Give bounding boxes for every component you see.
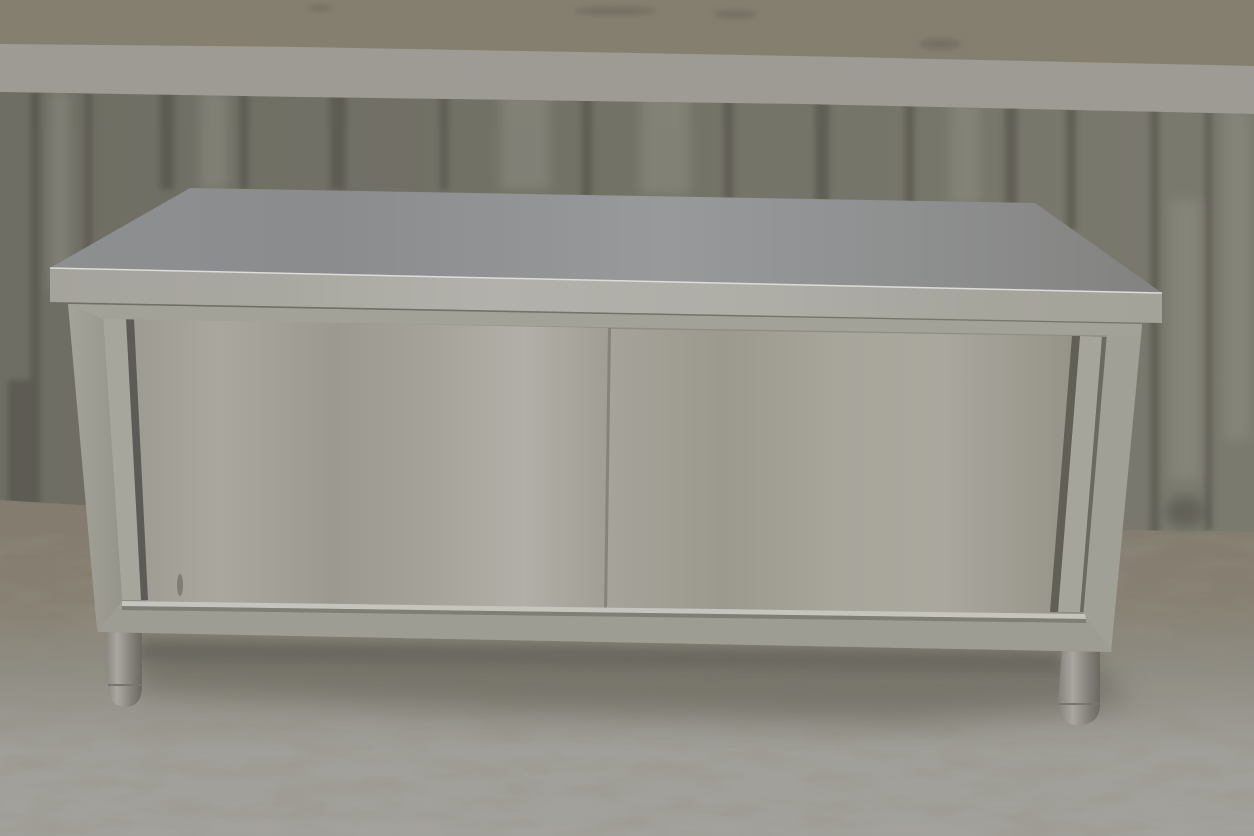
texture: wall streaks [8,90,1249,535]
right frame post [1082,326,1142,652]
left door rail [103,318,144,600]
background: concrete ledge [0,44,1254,114]
cabinet body back [68,304,1142,652]
cabinet [50,188,1162,725]
right door rail [1058,336,1102,612]
left frame post [68,304,122,630]
door mark [177,574,183,596]
background: upper wall [0,0,1254,70]
right leg [1058,650,1100,725]
background: concrete wall [0,92,1254,532]
texture: ground patches [0,535,1254,836]
door seam [604,328,611,612]
wall base dark patch [1165,497,1205,527]
right door [607,329,1072,614]
background: marks on upper wall [308,5,962,49]
bottom rail [97,601,1112,652]
top rail [68,304,1142,336]
background: ground [0,500,1254,836]
table top front edge [50,268,1162,323]
shadow under cabinet [130,640,1130,722]
left leg [104,630,142,707]
table top surface [50,188,1162,293]
right door channel [1050,336,1080,612]
left door [133,319,610,612]
left door channel [126,319,148,600]
table top highlight [50,268,1162,293]
